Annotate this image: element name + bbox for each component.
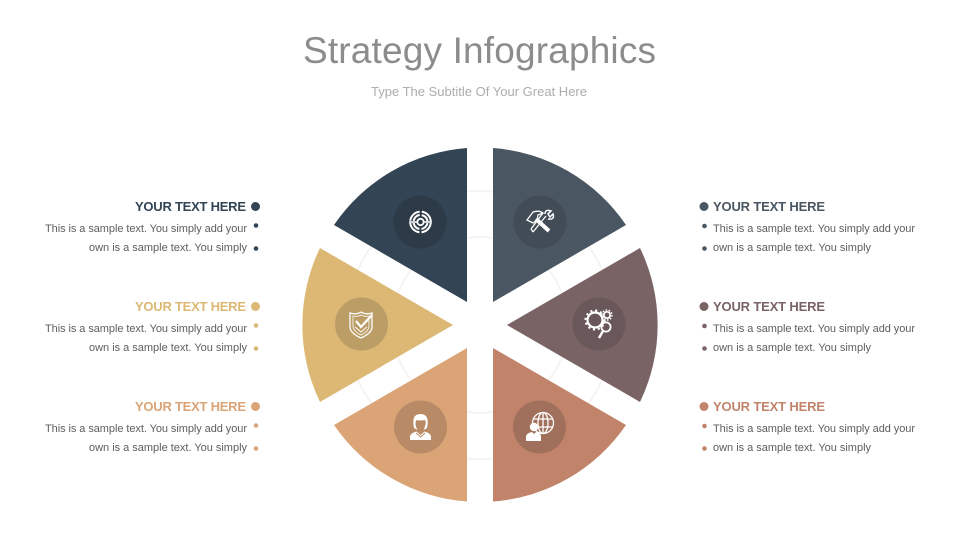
- text block: right 3: YOUR TEXT HERE: [713, 399, 825, 414]
- text block: left 1: own is a sample text. You simply: [89, 242, 248, 254]
- text block: right 1: YOUR TEXT HERE: [713, 199, 825, 214]
- text block: right 3: This is a sample text. You simply add your: [713, 423, 915, 435]
- panel: pie wheel: [302, 148, 658, 502]
- segment: bottom right terracotta: [493, 348, 626, 502]
- text block: left 1: YOUR TEXT HERE: [135, 199, 246, 214]
- text block: right 2: own is a sample text. You simply: [713, 342, 872, 354]
- text block: left 3: YOUR TEXT HERE: [135, 399, 246, 414]
- icon: woman: [394, 400, 447, 454]
- icon: hammer and wrench: [514, 196, 566, 248]
- text block: left 3: [45, 399, 260, 454]
- text block: left 2: YOUR TEXT HERE: [135, 299, 246, 314]
- text block: left 3: own is a sample text. You simply: [89, 442, 248, 454]
- text block: right 1: [700, 199, 915, 254]
- text block: right 1: own is a sample text. You simply: [713, 242, 872, 254]
- text block: right 3: [700, 399, 915, 454]
- icon: gears and magnifier: [572, 298, 626, 350]
- text block: right 3: own is a sample text. You simply: [713, 442, 872, 454]
- text block: right 2: YOUR TEXT HERE: [713, 299, 825, 314]
- text block: right 2: [700, 299, 915, 354]
- text block: left 2: This is a sample text. You simply add your: [45, 323, 247, 335]
- title: Strategy Infographics: [303, 30, 656, 71]
- text block: right 2: This is a sample text. You simply add your: [713, 323, 915, 335]
- text block: right 1: This is a sample text. You simply add your: [713, 223, 915, 235]
- icon: target: [394, 196, 446, 248]
- segment: left gold: [302, 248, 453, 402]
- segment: bottom left orange: [334, 348, 467, 502]
- segment: top left navy: [334, 148, 467, 302]
- text block: left 1: [45, 199, 260, 254]
- text block: left 2: [45, 299, 260, 354]
- segment: right mauve: [507, 248, 658, 402]
- text block: left 3: This is a sample text. You simply add your: [45, 423, 247, 435]
- segment: top right slate: [493, 148, 626, 302]
- text block: left 2: own is a sample text. You simply: [89, 342, 248, 354]
- text block: left 1: This is a sample text. You simply add your: [45, 223, 247, 235]
- icon: shield with check: [335, 298, 388, 350]
- subtitle: Type The Subtitle Of Your Great Here: [371, 84, 587, 99]
- icon: globe and person: [513, 400, 566, 454]
